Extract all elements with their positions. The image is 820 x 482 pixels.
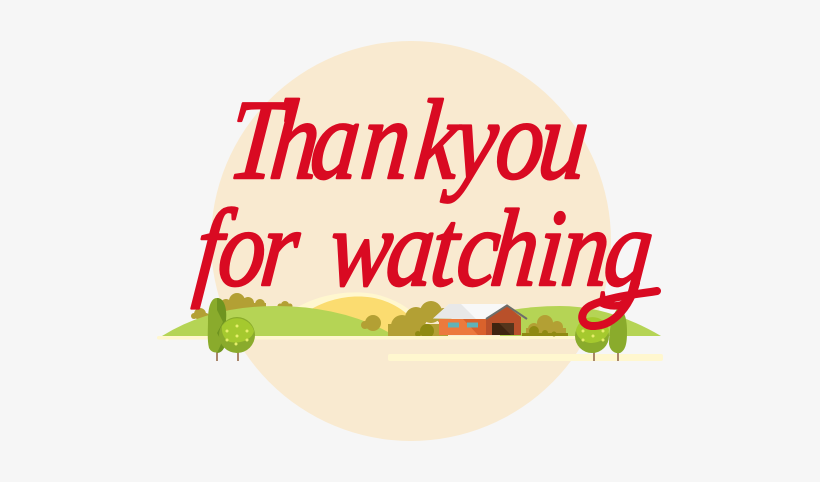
back bushes [191,293,292,320]
house [433,304,527,335]
left green hill [162,306,395,336]
house door shade [499,323,514,335]
house roof shade [433,304,476,319]
right tall tree [609,308,627,361]
left tall tree [208,298,226,361]
title line 1: Thankyou [223,77,595,203]
roof edge [486,306,527,319]
background circle [211,41,611,441]
house wall [439,319,486,335]
house door [492,323,514,335]
right bushes [522,315,568,336]
lower road strip [388,354,663,361]
house wall shadow [463,319,486,335]
centre bushes [361,301,452,338]
swash flourish [582,283,657,326]
house roof [433,304,507,319]
landscape scene [157,292,663,361]
title line 2: for watching [190,188,659,310]
ground line [157,336,605,340]
right round tree [575,317,609,361]
right green hill [500,306,661,336]
left round tree [219,317,255,361]
windows [448,322,478,328]
yellow hill [293,292,430,336]
house gable [486,306,521,335]
